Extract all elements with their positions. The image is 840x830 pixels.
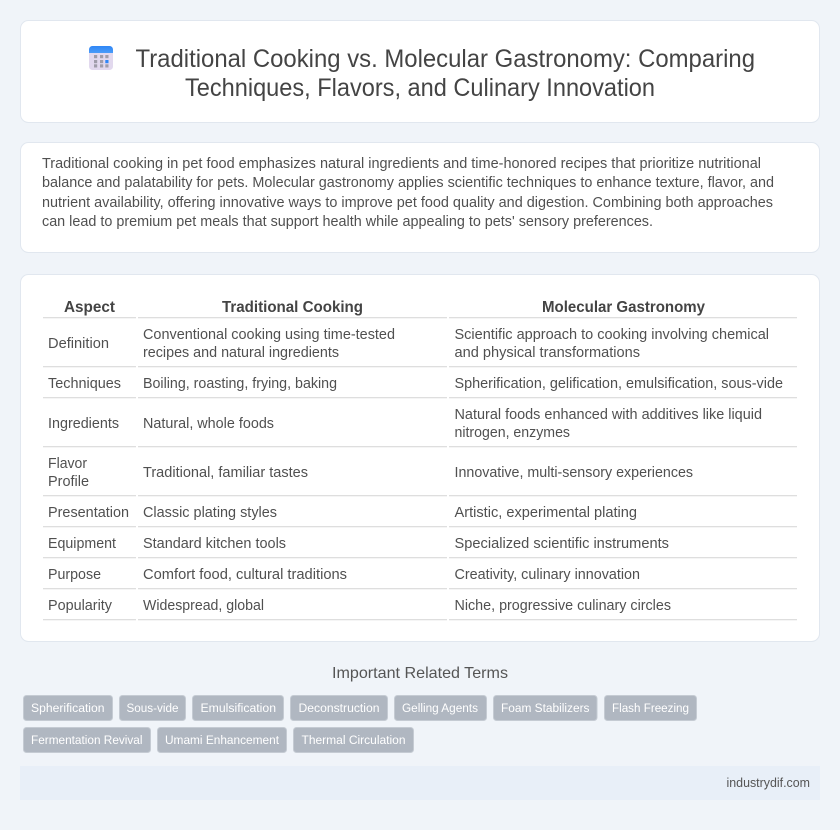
row: equipment: Specialized scientific instruments — [454, 536, 669, 552]
row: purpose: Creativity, culinary innovation — [454, 567, 640, 583]
row: popularity — [43, 598, 797, 620]
row: popularity: Widespread, global — [143, 598, 264, 614]
row: flavor profile: Traditional, familiar tastes — [143, 465, 308, 481]
tag: Spherification — [24, 696, 112, 720]
tag: Umami Enhancement — [158, 728, 286, 752]
table header — [43, 299, 797, 318]
intro text: Traditional cooking in pet food emphasizes natural ingredients and time-honored recipes that prioritize nutritional — [42, 156, 761, 172]
row: presentation: Artistic, experimental plating — [454, 505, 637, 521]
related terms tags — [24, 696, 696, 752]
row: equipment: Equipment — [48, 536, 116, 552]
intro text — [42, 156, 774, 230]
row: popularity: Popularity — [48, 598, 113, 614]
icon: calendar — [89, 46, 113, 70]
tag: Foam Stabilizers: Foam Stabilizers — [501, 701, 590, 715]
tag: Deconstruction: Deconstruction — [298, 701, 380, 715]
tag: Fermentation Revival — [24, 728, 150, 752]
row: presentation: Classic plating styles — [143, 505, 277, 521]
row: presentation — [43, 505, 797, 527]
row: popularity: Niche, progressive culinary circles — [454, 598, 671, 614]
row: ingredients: Natural foods enhanced with additives like liquid — [454, 407, 762, 423]
row: flavor profile: Flavor — [48, 456, 87, 472]
tag: Gelling Agents: Gelling Agents — [402, 701, 478, 715]
panel: header — [20, 20, 820, 122]
footer — [20, 766, 820, 800]
row: definition: Scientific approach to cooking involving chemical — [454, 327, 769, 343]
row: flavor profile — [43, 456, 797, 496]
row: flavor profile: Innovative, multi-sensory experiences — [454, 465, 693, 481]
row: techniques — [43, 376, 797, 398]
title: Traditional Cooking vs. Molecular Gastronomy: Comparing — [136, 45, 755, 73]
table header: Molecular Gastronomy — [542, 299, 705, 316]
tag: Emulsification — [192, 696, 284, 720]
title — [136, 45, 755, 102]
panel: comparison table — [20, 274, 820, 642]
footer source text: industrydif.com — [726, 776, 810, 790]
tag: Fermentation Revival: Fermentation Revival — [31, 733, 142, 747]
row: definition: and physical transformations — [454, 345, 640, 361]
intro text: nutrient availability, offering innovative ways to improve pet food quality and digestion. Combining both approaches — [42, 195, 773, 211]
tag: Flash Freezing: Flash Freezing — [612, 701, 689, 715]
row: ingredients — [43, 407, 797, 447]
intro text: balance and palatability for pets. Molecular gastronomy applies scientific techniques to enhance texture, flavor, and — [42, 175, 774, 191]
row: equipment — [43, 536, 797, 558]
row: definition: Definition — [48, 336, 109, 352]
panel: introduction — [20, 142, 820, 252]
row: purpose — [43, 567, 797, 589]
tag: Deconstruction — [290, 696, 388, 720]
tag: Flash Freezing — [604, 696, 696, 720]
row: purpose: Purpose — [48, 567, 101, 583]
related terms heading: Important Related Terms — [332, 665, 508, 682]
row: ingredients: Ingredients — [48, 416, 119, 432]
row: definition — [43, 327, 797, 367]
row: flavor profile: Profile — [48, 474, 89, 490]
row: techniques: Techniques — [48, 376, 121, 392]
tag: Foam Stabilizers — [494, 696, 597, 720]
row: ingredients: nitrogen, enzymes — [454, 425, 570, 441]
tag: Gelling Agents — [394, 696, 486, 720]
tag: Emulsification: Emulsification — [200, 701, 276, 715]
tag: Umami Enhancement: Umami Enhancement — [165, 733, 280, 747]
tag: Sous-vide — [120, 696, 186, 720]
row: definition: recipes and natural ingredients — [143, 345, 339, 361]
row: purpose: Comfort food, cultural traditions — [143, 567, 347, 583]
row: equipment: Standard kitchen tools — [143, 536, 286, 552]
tag: Thermal Circulation: Thermal Circulation — [302, 733, 406, 747]
tag: Spherification: Spherification — [31, 701, 105, 715]
row: techniques: Boiling, roasting, frying, baking — [143, 376, 337, 392]
title: Techniques, Flavors, and Culinary Innovation — [185, 74, 655, 102]
intro text: can lead to premium pet meals that support health while appealing to pets' sensory preferences. — [42, 214, 653, 230]
row: definition: Conventional cooking using time-tested — [143, 327, 395, 343]
table header: Traditional Cooking — [222, 299, 363, 316]
tag: Sous-vide: Sous-vide — [126, 701, 179, 715]
row: presentation: Presentation — [48, 505, 129, 521]
row: techniques: Spherification, gelification, emulsification, sous-vide — [454, 376, 783, 392]
table header: Aspect — [64, 299, 116, 316]
row: ingredients: Natural, whole foods — [143, 416, 274, 432]
tag: Thermal Circulation — [294, 728, 414, 752]
